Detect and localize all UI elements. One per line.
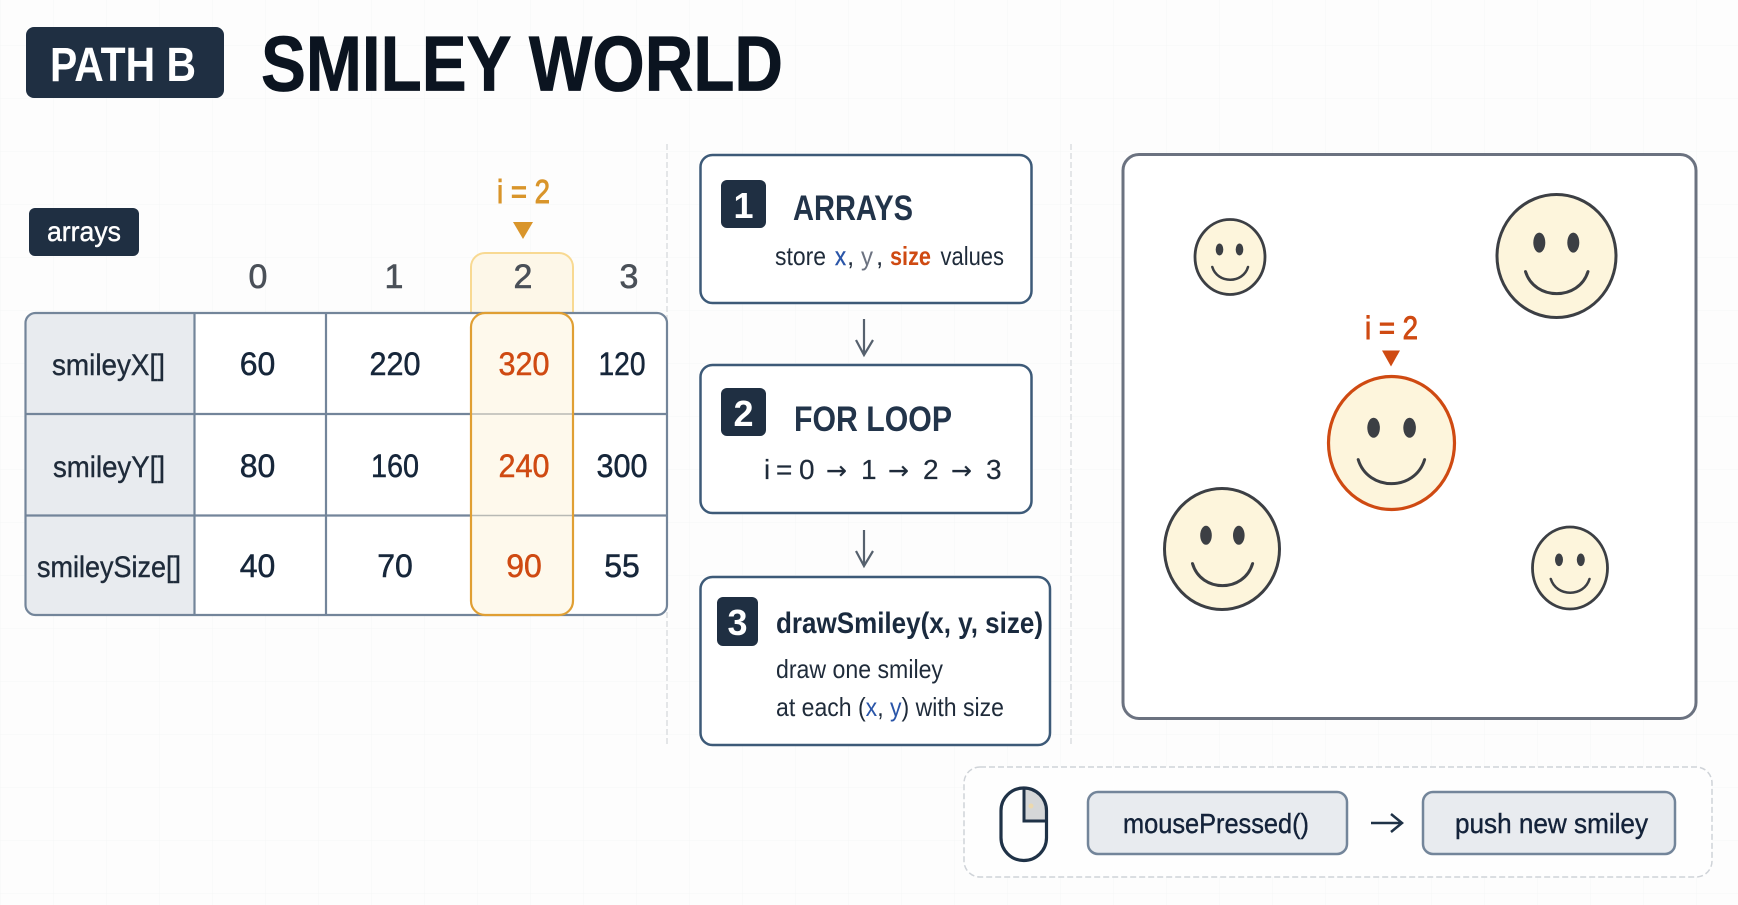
label: i = 2 index pointer (497, 173, 550, 239)
smiley: highlighted center (1328, 376, 1454, 510)
highlighted values: 320 (498, 346, 550, 382)
highlight: column i = 2 (471, 313, 573, 615)
row labels (37, 349, 181, 584)
divider lines (667, 144, 1071, 745)
table values: 40 (240, 548, 275, 584)
smiley: small top left (1195, 220, 1265, 294)
panel: mouse interaction (964, 767, 1712, 877)
arrow: to push (1371, 814, 1402, 832)
highlighted values: 240 (498, 448, 550, 484)
column indexes (249, 258, 638, 296)
table values: 70 (377, 548, 413, 584)
icon: mouse (1001, 788, 1046, 860)
text: loop sequence: → (826, 456, 847, 485)
button: mousePressed(): mousePressed() (1123, 808, 1309, 839)
row labels: smileyY[] (53, 451, 165, 484)
table values: 60 (240, 346, 275, 382)
label: i = 2 smiley pointer: i = 2 (1365, 310, 1418, 346)
number badge 3: 3 (727, 602, 748, 643)
text: store values: y (861, 241, 873, 271)
arrow: step 1 to 2 (856, 319, 873, 355)
text: store values: , (876, 241, 883, 271)
table values: 80 (240, 448, 275, 484)
label: i = 2 smiley pointer (1365, 310, 1418, 366)
arrow: step 2 to 3 (856, 530, 873, 566)
table grid (26, 313, 667, 615)
row labels: smileyX[] (52, 349, 165, 382)
heading: FOR LOOP: FOR LOOP (794, 400, 952, 439)
button: push new smiley (1423, 792, 1675, 854)
heading: drawSmiley: drawSmiley(x, y, size) (776, 607, 1043, 640)
text: loop sequence: 3 (986, 454, 1002, 485)
text: loop sequence: → (888, 456, 909, 485)
column indexes: 1 (385, 258, 403, 296)
number badge 2 (721, 388, 766, 436)
highlighted values (498, 346, 550, 584)
text: loop sequence: 2 (923, 454, 939, 485)
text: draw description: draw one smiley (776, 654, 943, 684)
smiley: large top right (1497, 194, 1616, 318)
text: loop sequence: i (764, 454, 770, 485)
text: store values (775, 241, 1004, 271)
number badge 1: 1 (733, 185, 754, 226)
panel: canvas (1123, 154, 1696, 718)
panel: step 2 for loop (700, 365, 1032, 513)
text: loop sequence: = (776, 454, 792, 485)
text: store values: x (835, 241, 846, 271)
panel: arrays table (26, 173, 667, 615)
text: store values: values (940, 241, 1004, 271)
table values (240, 346, 648, 584)
number badge 2: 2 (733, 393, 754, 434)
badge: PATH B: PATH B (50, 39, 196, 92)
panel: step 1 arrays (700, 155, 1032, 303)
tag: arrays: arrays (47, 216, 121, 247)
button: push new smiley: push new smiley (1455, 808, 1648, 839)
table values: 55 (604, 548, 640, 584)
number badge 3 (717, 597, 758, 646)
badge: PATH B (26, 27, 224, 98)
title: SMILEY WORLD (261, 20, 783, 108)
table values: 160 (371, 448, 419, 484)
label: i = 2 index pointer: i = 2 (497, 173, 550, 210)
heading: ARRAYS: ARRAYS (793, 189, 913, 228)
panel: step 3 drawSmiley (700, 577, 1050, 745)
column indexes: 3 (620, 258, 638, 296)
smiley: small bottom right (1532, 527, 1608, 609)
number badge 1 (721, 180, 766, 228)
column indexes: 2 (514, 258, 532, 296)
smiley: large bottom left (1164, 488, 1280, 610)
text: store values: , (847, 241, 854, 271)
text: loop sequence: 0 (799, 454, 815, 485)
text: store values: store (775, 241, 826, 271)
text: draw description: at each (x, y) with size (776, 692, 1004, 722)
table values: 300 (596, 448, 648, 484)
row labels: smileySize[] (37, 551, 181, 584)
text: store values: size (890, 241, 931, 271)
table values: 220 (370, 346, 420, 382)
table values: 120 (598, 346, 646, 382)
text: draw description (776, 654, 1004, 722)
highlighted values: 90 (506, 548, 542, 584)
column indexes: 0 (249, 258, 267, 296)
button: mousePressed() (1088, 792, 1347, 854)
text: loop sequence: 1 (861, 454, 877, 485)
tag: arrays (29, 208, 139, 256)
highlight: column header cell (471, 253, 573, 313)
text: loop sequence: → (951, 456, 972, 485)
